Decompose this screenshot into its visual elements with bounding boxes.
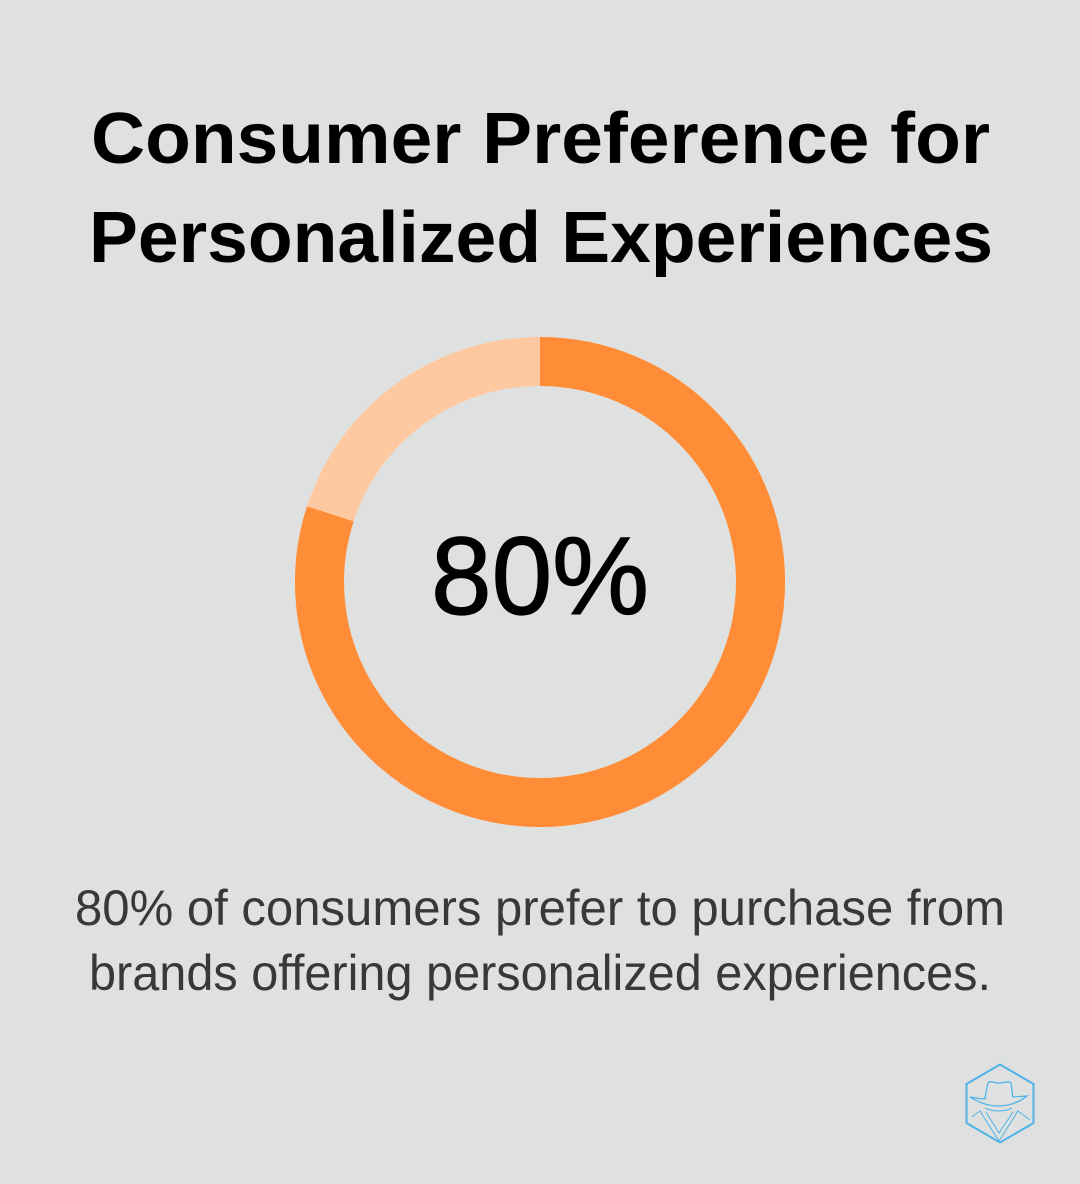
donut chart <box>320 362 761 802</box>
title: Consumer Preference for <box>91 99 990 179</box>
center value: 80% <box>431 515 649 638</box>
donut segment: 80% <box>320 362 761 802</box>
description text: brands offering personalized experiences. <box>89 945 991 1001</box>
donut segment: remaining 20% <box>320 362 760 802</box>
hexagon outline <box>966 1064 1034 1142</box>
hat <box>970 1082 1027 1106</box>
description text: 80% of consumers prefer to purchase from <box>75 880 1005 936</box>
collar <box>972 1108 1030 1141</box>
title: Personalized Experiences <box>89 198 993 278</box>
title <box>89 99 993 278</box>
description text <box>75 880 1005 1001</box>
icon: hexagon spy logo <box>966 1064 1034 1142</box>
